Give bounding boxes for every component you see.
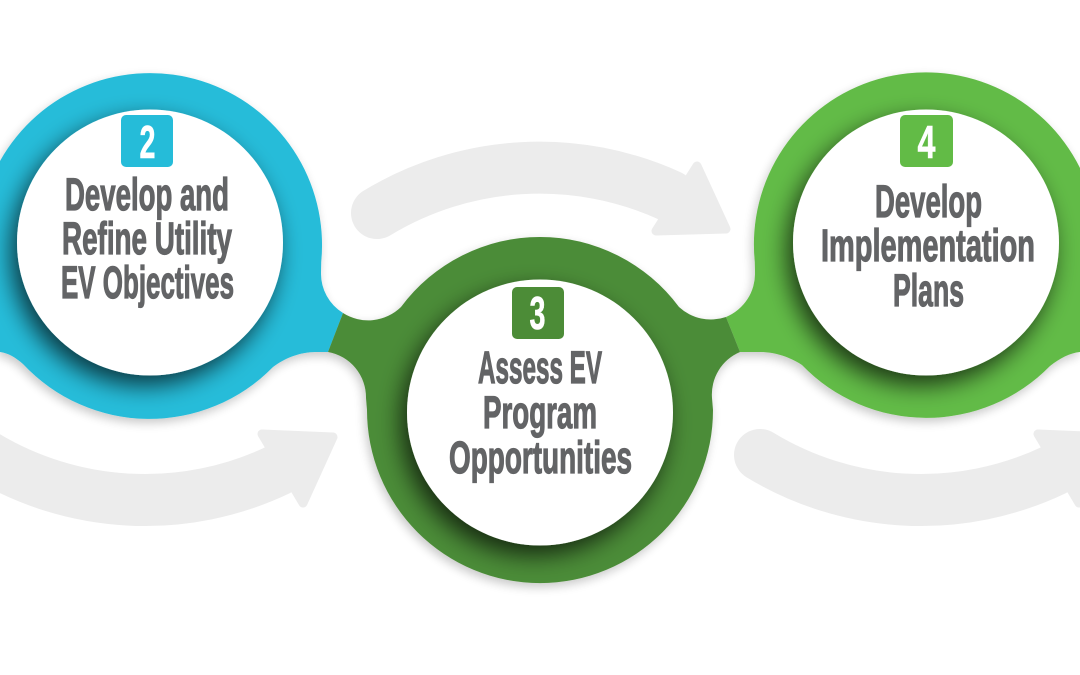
heading step 4: Plans — [893, 265, 964, 316]
arrow: top, from step 2 to step 4 — [377, 166, 726, 231]
heading step 3: Assess EV — [478, 342, 602, 393]
number badge 4 — [900, 115, 953, 168]
white disc step 3 — [407, 280, 673, 546]
number badge 3: 3 — [530, 287, 546, 339]
number badge 2 — [121, 115, 173, 168]
heading step 4: Develop — [875, 176, 982, 227]
connected band: three coloured segments — [0, 72, 1080, 583]
heading step 3 — [449, 342, 632, 483]
number badge 4: 4 — [918, 116, 936, 168]
arrow: bottom right, out of step 4 — [760, 434, 1080, 503]
heading step 2 — [61, 169, 234, 308]
heading step 2: Refine Utility — [62, 213, 232, 264]
panel: step 3 circle — [407, 280, 673, 546]
band segment: blue step 2 — [0, 73, 343, 419]
heading step 3: Opportunities — [449, 432, 632, 483]
number badge 3 — [512, 287, 564, 339]
white disc step 2 — [17, 110, 283, 376]
band segment: dark green step 3 — [328, 237, 740, 583]
heading step 2: Develop and — [65, 169, 229, 220]
panel: step 2 circle — [17, 110, 283, 376]
white disc step 4 — [793, 110, 1059, 376]
heading step 3: Program — [483, 387, 597, 438]
heading step 4 — [821, 176, 1035, 316]
arrow: bottom left, into step 3 — [0, 434, 333, 503]
heading step 2: EV Objectives — [61, 257, 234, 308]
panel: step 4 circle — [793, 110, 1059, 376]
band segment: light green step 4 — [726, 72, 1080, 418]
number badge 2: 2 — [140, 116, 156, 168]
